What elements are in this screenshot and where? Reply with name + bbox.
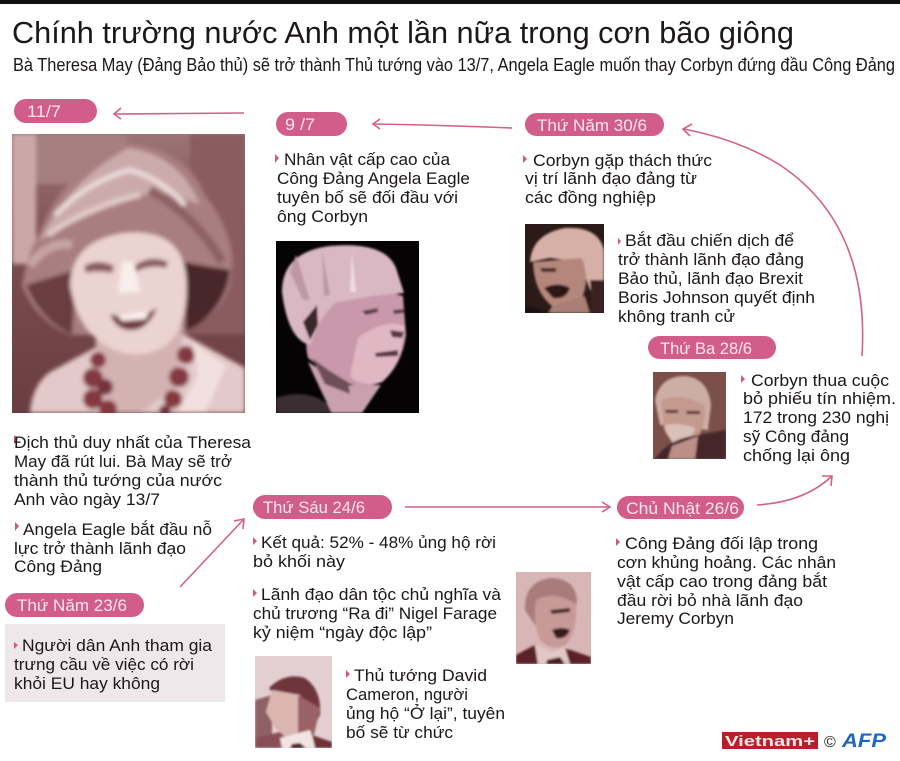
- text block: chống lại ông: [743, 446, 850, 465]
- text block: Boris Johnson: trở thành lãnh đạo đảng: [618, 250, 804, 269]
- logo: Vietnam+: [722, 732, 818, 750]
- panel: Thứ Sáu 24/6: [253, 495, 591, 748]
- text block: Boris Johnson: Bắt đầu chiến dịch để: [625, 231, 794, 250]
- panel: Thứ Ba 28/6: [648, 336, 896, 465]
- arrow: 23/6 to 24/6: [180, 519, 244, 587]
- arrow: 28/6 to 30/6: [683, 124, 863, 356]
- date label: Thứ Ba 28/6: [648, 336, 776, 359]
- copyright mark: ©: [824, 734, 836, 751]
- arrow: 9/7 to 11/7: [114, 108, 244, 119]
- text block: result: [253, 533, 496, 571]
- date label: 11/7: 11/7: [27, 102, 61, 121]
- text block: Nigel Farage: kỷ niệm “ngày độc lập”: [253, 623, 432, 642]
- text block: Theresa May: May đã rút lui. Bà May sẽ trở: [14, 452, 232, 471]
- text block: các đồng nghiệp: [525, 188, 656, 207]
- date label: 11/7: [14, 99, 97, 123]
- portrait: Jeremy Corbyn: [653, 372, 726, 459]
- arrow: 26/6 to 28/6: [757, 476, 832, 505]
- text block: Angela Eagle: Angela Eagle bắt đầu nỗ: [23, 520, 212, 539]
- text block: [275, 150, 470, 226]
- date label: Thứ Năm 23/6: Thứ Năm 23/6: [17, 596, 127, 615]
- text block: Theresa May: thành thủ tướng của nước: [14, 471, 223, 490]
- text block: Jeremy Corbyn: [617, 609, 734, 628]
- text block: David Cameron: ủng hộ “Ở lại”, tuyên: [346, 704, 505, 723]
- portrait: Angela Eagle: [276, 241, 419, 413]
- text block: [616, 534, 836, 628]
- panel: Thứ Năm 23/6: [5, 593, 225, 702]
- date label: Thứ Sáu 24/6: Thứ Sáu 24/6: [263, 498, 365, 517]
- text block: Nigel Farage: [253, 585, 502, 642]
- beads: [90, 352, 106, 368]
- logo: AFP: AFP: [841, 731, 886, 752]
- callout box: [5, 624, 225, 702]
- text block: Boris Johnson: Boris Johnson quyết định: [618, 288, 815, 307]
- portrait: Theresa May: [12, 134, 245, 418]
- title: Chính trường nước Anh một lần nữa trong cơn bão giông: [12, 15, 794, 50]
- date label: Thứ Năm 30/6: [525, 113, 664, 136]
- text block: Nigel Farage: chủ trương “Ra đi” Nigel Farage: [253, 604, 497, 623]
- date label: Thứ Ba 28/6: Thứ Ba 28/6: [660, 339, 752, 358]
- text block: Angela Eagle: Công Đảng: [14, 557, 102, 576]
- text block: Corbyn thua cuộc: [751, 371, 890, 390]
- text block: đầu rời bỏ nhà lãnh đạo: [617, 591, 803, 610]
- date label: Thứ Sáu 24/6: [253, 495, 392, 519]
- text block: Boris Johnson: không tranh cử: [618, 307, 735, 326]
- portrait: Boris Johnson: [525, 224, 604, 313]
- panel: 9/7: [275, 112, 470, 413]
- top bar: [0, 0, 900, 4]
- date label: 9/7: [276, 112, 347, 136]
- text block: [523, 151, 713, 207]
- text block: David Cameron: Thủ tướng David: [354, 666, 487, 685]
- text block: Nigel Farage: Lãnh đạo dân tộc chủ nghĩa và: [261, 585, 502, 604]
- text block: result: Kết quả: 52% - 48% ủng hộ rời: [261, 533, 496, 552]
- text block: David Cameron: bố sẽ từ chức: [346, 723, 453, 742]
- callout box: khỏi EU hay không: [14, 674, 160, 693]
- text block: Công Đảng đối lập trong: [625, 534, 818, 553]
- date label: 9/7: 9 /7: [285, 115, 315, 134]
- text block: David Cameron: Cameron, người: [346, 685, 468, 704]
- panel: Chủ Nhật 26/6: [616, 496, 836, 628]
- text block: result: bỏ khối này: [253, 552, 346, 571]
- panel: 11/7: [12, 99, 252, 576]
- text block: tuyên bố sẽ đối đầu với: [277, 188, 458, 207]
- text block: Corbyn gặp thách thức: [533, 151, 713, 170]
- source logos: [722, 731, 886, 752]
- text block: Angela Eagle: lực trở thành lãnh đạo: [14, 539, 186, 558]
- date label: Thứ Năm 30/6: Thứ Năm 30/6: [537, 116, 647, 135]
- hair mass: [22, 143, 232, 335]
- text block: Theresa May: Địch thủ duy nhất của Theresa: [14, 433, 252, 452]
- text block: Nhân vật cấp cao của: [284, 150, 451, 169]
- neck: [95, 325, 182, 413]
- text block: 172 trong 230 nghị: [743, 408, 889, 427]
- shoulders drawn under the head: [30, 335, 245, 413]
- portrait: Nigel Farage: [516, 572, 591, 664]
- text block: vật cấp cao trong đảng bắt: [617, 572, 827, 591]
- callout box: trưng cầu về việc có rời: [14, 655, 194, 674]
- arrow: 30/6 to 9/7: [373, 119, 512, 129]
- text block: Công Đảng Angela Eagle: [277, 169, 470, 188]
- text block: vị trí lãnh đạo đảng từ: [525, 169, 697, 188]
- callout box: Người dân Anh tham gia: [22, 636, 213, 655]
- text block: sỹ Công đảng: [743, 427, 849, 446]
- text block: Theresa May: [14, 433, 252, 509]
- text block: Boris Johnson: Bảo thủ, lãnh đạo Brexit: [618, 269, 803, 288]
- text block: Angela Eagle: [14, 520, 212, 576]
- text block: Theresa May: Anh vào ngày 13/7: [14, 490, 160, 509]
- text block: David Cameron: [346, 666, 505, 742]
- date label: Chủ Nhật 26/6: Chủ Nhật 26/6: [626, 499, 739, 518]
- text block: ông Corbyn: [277, 207, 368, 226]
- text block: bỏ phiếu tín nhiệm.: [743, 389, 896, 408]
- arrow: 24/6 to 26/6: [405, 502, 610, 512]
- text block: [741, 371, 896, 465]
- face: [70, 233, 187, 354]
- text block: cơn khủng hoảng. Các nhân: [617, 553, 836, 572]
- text block: Boris Johnson: [618, 231, 815, 326]
- logo: Vietnam+: Vietnam+: [725, 733, 815, 750]
- portrait: David Cameron: [255, 656, 332, 748]
- date label: Thứ Năm 23/6: [5, 593, 144, 617]
- panel: Thứ Năm 30/6: [523, 113, 815, 326]
